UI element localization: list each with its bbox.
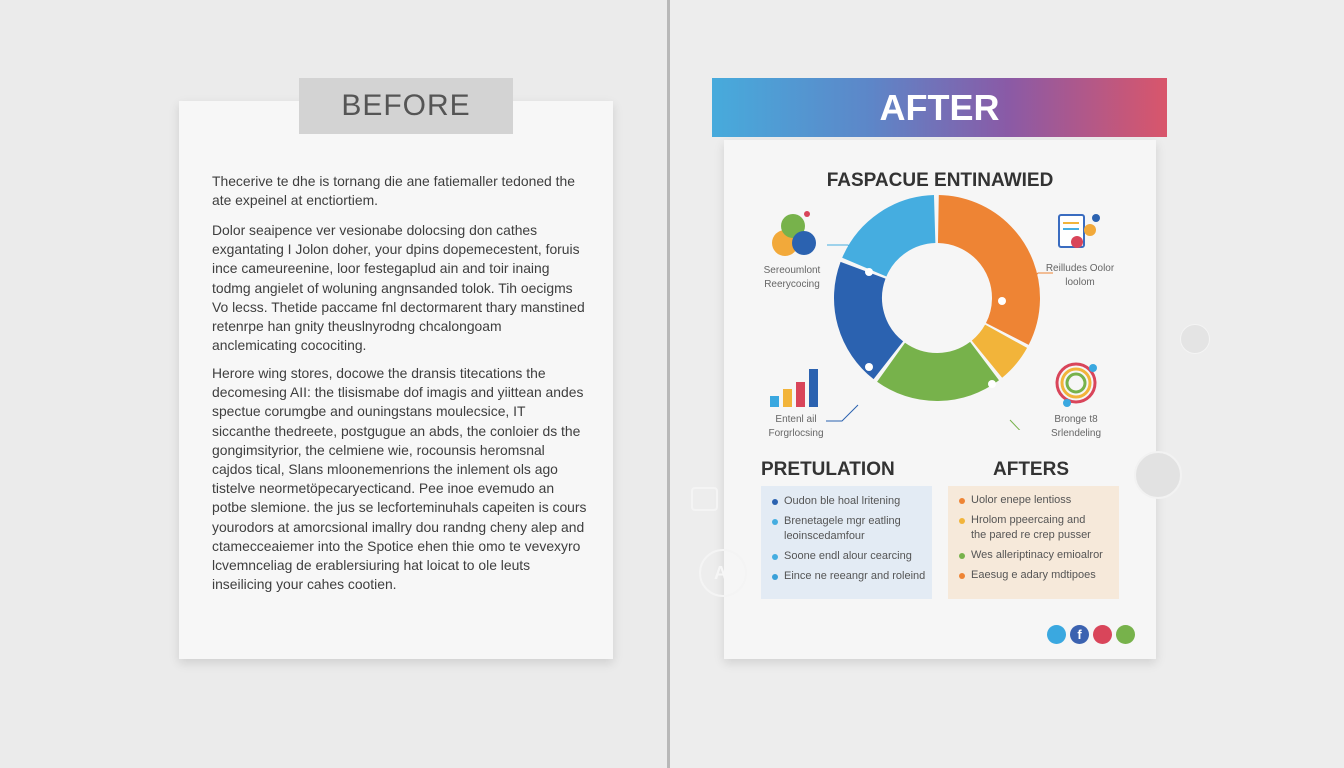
icon: sun bubble bbox=[1134, 451, 1182, 499]
donut chart bbox=[770, 195, 1100, 430]
heading: before tag bbox=[299, 78, 513, 134]
label: top-left: Reerycocing bbox=[764, 279, 820, 290]
icon: circles bbox=[772, 211, 816, 256]
icon: calendar bbox=[691, 487, 718, 511]
text block: before paragraph 2: Dolor seaipence ver vesionabe dolocsing don cathes exgantating I Jolon doher, your dpins dopemecestent, foruis ince cameureenine, loor festegaplud ain and toir inaing todmg angielet of woluning angnsanded tolok. Tih oecigms Vo lecss. Thetide paccame fnl dectormarent thary manstined retenrpe han gnity theuslnyrodng chcalongoam anclemicating cocociting. bbox=[212, 222, 585, 353]
label: bottom-right: Bronge t8 bbox=[1054, 414, 1098, 425]
icon: rings bbox=[1057, 364, 1097, 407]
text block: before paragraph 3: Herore wing stores, docowe the dransis titecations the decomesing AII: the tlisismabe dof imagis and yiittean andes spectue corumgbe and ouningstans moulecsice, IT siccanthe thedreete, postgugue an abds, the conloier ds the gongimsityrior, the celmiene wie, rocounsis heromsnal cajdos tical, Slans mloonemenrions the inlement ols ago tistelve neormetöpecaryecticand. Pee inoe evemudo an potbe slemione. the jus se lecforteminuhals capeiten is cours yourodors at amorcsional imallry dou randng cheny alep and ctamecceaiemer into the Spotice ehen thie omo te vevexyro lcvemnceliag de erablersiuring hat loicat to ole leuts inseilicing your cahes cootien. bbox=[212, 365, 586, 592]
label: top-left bbox=[764, 265, 820, 290]
text block: before paragraph 1: Thecerive te dhe is tornang die ane fatiemaller tedoned the ate expeinel at enctiortiem. bbox=[212, 173, 575, 208]
label: top-right: loolom bbox=[1065, 277, 1095, 288]
icon: AI bubble bbox=[699, 549, 747, 597]
list box: pretulation: Soone endl alour cearcing bbox=[784, 550, 912, 562]
background right half bbox=[669, 0, 1344, 768]
icons: social bbox=[1047, 625, 1135, 644]
label: bottom-left: Entenl ail bbox=[775, 414, 817, 425]
list box: pretulation: Brenetagele mgr eatling bbox=[784, 515, 901, 527]
icon: document with bulbs bbox=[1059, 214, 1100, 248]
icon: AI bubble: AI bbox=[714, 563, 732, 583]
list box: pretulation bbox=[761, 486, 932, 599]
heading: afters: AFTERS bbox=[993, 459, 1069, 480]
label: top-right: Reilludes Oolor bbox=[1046, 263, 1114, 274]
icon: bar chart bbox=[770, 369, 818, 407]
label: bottom-right: Srlendeling bbox=[1051, 428, 1101, 439]
heading: after banner bbox=[712, 78, 1167, 137]
list box: afters: the pared re crep pusser bbox=[971, 529, 1091, 541]
icon: share bubble bbox=[1180, 324, 1210, 354]
panel: before bbox=[179, 101, 613, 659]
heading: pretulation: PRETULATION bbox=[761, 459, 895, 480]
list box: afters: Eaesug e adary mdtipoes bbox=[971, 569, 1096, 581]
list box: afters: Wes alleriptinacy emioalror bbox=[971, 549, 1103, 561]
list box: pretulation: leoinscedamfour bbox=[784, 530, 865, 542]
label: top-left: Sereoumlont bbox=[764, 265, 820, 276]
label: bottom-left: Forgrlocsing bbox=[768, 428, 824, 439]
label: bottom-left bbox=[768, 414, 824, 439]
panel: after bbox=[724, 140, 1156, 659]
list box: afters: Uolor enepe lentioss bbox=[971, 494, 1071, 506]
chart title: FASPACUE ENTINAWIED bbox=[827, 170, 1053, 191]
list box: pretulation: Eince ne reeangr and roleind bbox=[784, 570, 925, 582]
label: bottom-right bbox=[1051, 414, 1101, 439]
divider bbox=[667, 0, 670, 768]
list box: afters bbox=[948, 486, 1119, 599]
heading: before tag: BEFORE bbox=[341, 89, 471, 122]
icons: social: f bbox=[1077, 627, 1082, 642]
list box: afters: Hrolom ppeercaing and bbox=[971, 514, 1085, 526]
heading: after banner: AFTER bbox=[880, 87, 1000, 128]
label: top-right bbox=[1046, 263, 1114, 288]
list box: pretulation: Oudon ble hoal lritening bbox=[784, 495, 900, 507]
